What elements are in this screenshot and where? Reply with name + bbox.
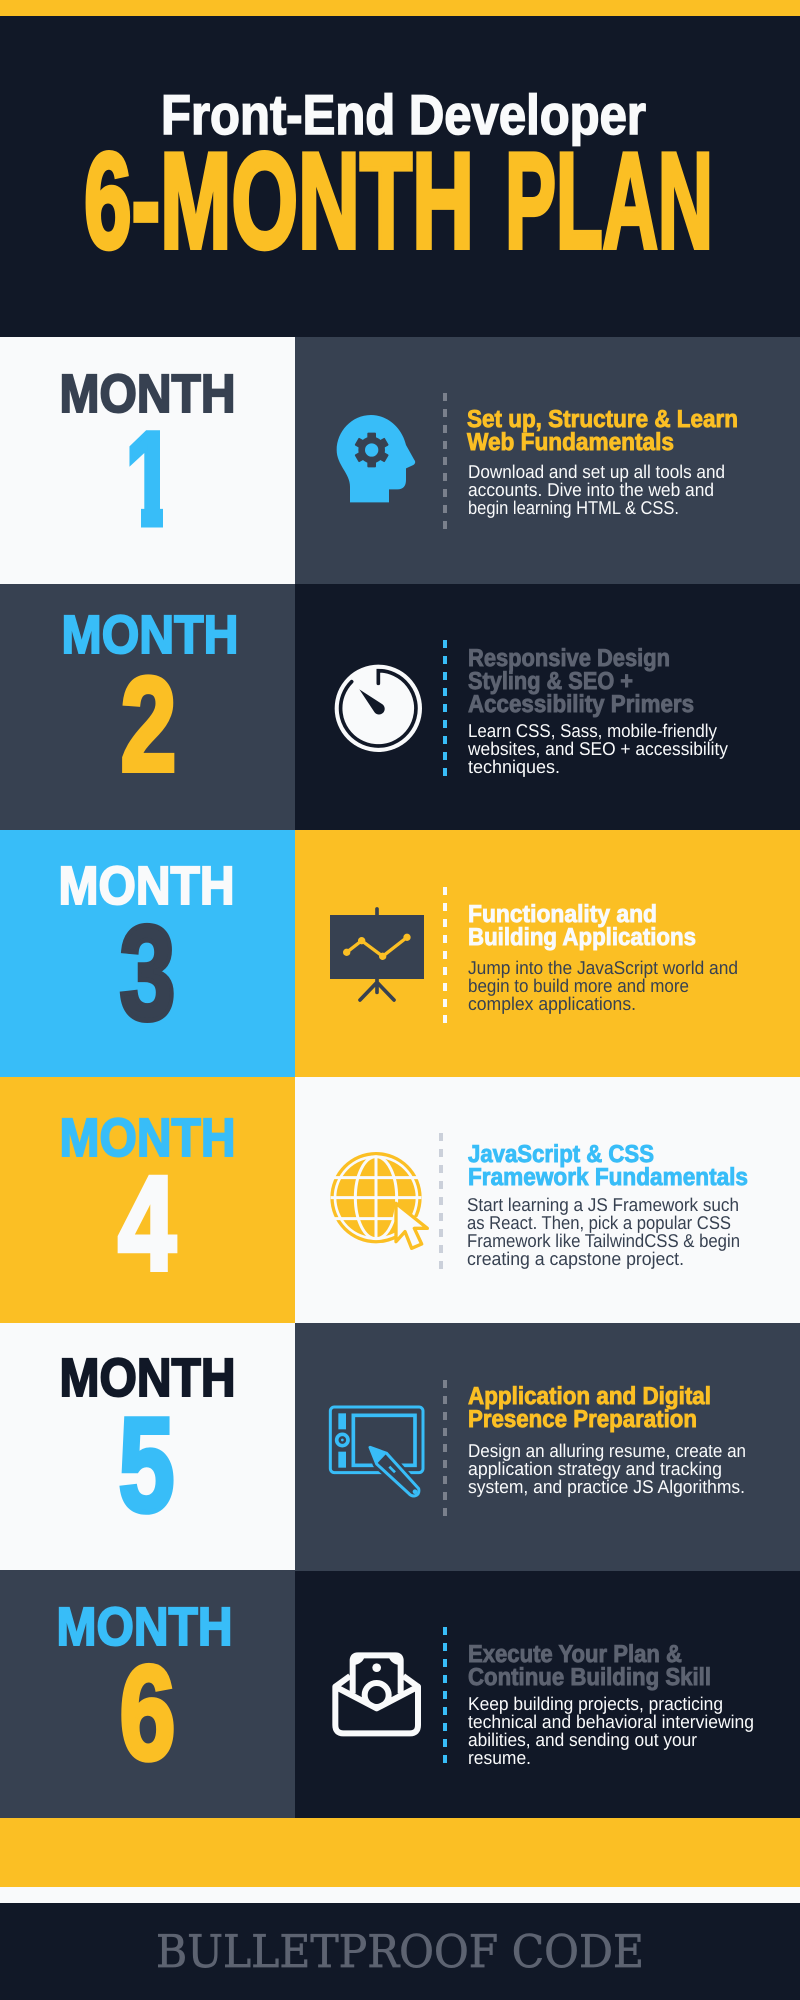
month 1 heading: Set up, Structure & Learn xyxy=(467,406,738,433)
month 2 heading: Styling & SEO + xyxy=(468,668,633,695)
month 2 description: techniques. xyxy=(468,756,560,777)
month 2 description: Learn CSS, Sass, mobile-friendly xyxy=(468,720,718,741)
month 6 heading: Continue Building Skill xyxy=(468,1664,711,1691)
icon: head with gear xyxy=(337,415,415,502)
panel: month 5 xyxy=(0,1323,800,1571)
month 5 description: system, and practice JS Algorithms. xyxy=(468,1476,745,1497)
month 1 content xyxy=(295,337,800,584)
month 6 badge: 6 xyxy=(120,1639,176,1788)
month 6 badge: MONTH xyxy=(56,1597,232,1657)
panel: month 4 xyxy=(0,1077,800,1323)
month 2 description: websites, and SEO + accessibility xyxy=(467,738,729,759)
month 5 description: Design an alluring resume, create an xyxy=(468,1440,746,1461)
month 4 badge: 4 xyxy=(118,1150,176,1298)
month 6 description: abilities, and sending out your xyxy=(468,1729,697,1750)
month 4 description xyxy=(467,1194,740,1269)
footer brand: Bulletproof Code: BULLETPROOF CODE xyxy=(156,1925,644,1978)
month 5 badge: MONTH xyxy=(60,1348,236,1408)
month 2 badge: 2 xyxy=(120,650,176,800)
month 1 badge: 1 xyxy=(125,405,175,554)
month 2 heading: Accessibility Primers xyxy=(468,691,694,718)
month 5 heading xyxy=(468,1383,711,1433)
month 3 description: complex applications. xyxy=(468,993,636,1014)
icon: envelope with cash xyxy=(335,1655,418,1733)
month 3 heading: Functionality and xyxy=(468,901,657,928)
month 4 description: Start learning a JS Framework such xyxy=(467,1194,739,1215)
footer band xyxy=(0,1818,800,2000)
month 4 description: Framework like TailwindCSS & begin xyxy=(467,1230,740,1251)
month 5 badge: 5 xyxy=(118,1391,174,1540)
month 1 description: accounts. Dive into the web and xyxy=(468,479,714,500)
month 6 description xyxy=(468,1693,754,1768)
month 3 badge: 3 xyxy=(120,899,176,1048)
title: 6-MONTH PLAN: 6-MONTH xyxy=(84,124,474,276)
panel: month 6 xyxy=(0,1570,800,1818)
month 2 badge xyxy=(0,584,295,830)
month 3 description xyxy=(468,957,738,1014)
panel: month 2 xyxy=(0,584,800,830)
month 4 description: as React. Then, pick a popular CSS xyxy=(467,1212,731,1233)
icon: globe with cursor xyxy=(330,1152,427,1248)
month 5 description xyxy=(468,1440,746,1497)
month 5 description: application strategy and tracking xyxy=(468,1458,722,1479)
month 1 description xyxy=(468,461,725,518)
month 1 description: begin learning HTML & CSS. xyxy=(468,497,679,518)
month 3 heading xyxy=(468,901,696,951)
month 3 heading: Building Applications xyxy=(468,924,696,951)
month 3 badge xyxy=(0,830,295,1077)
month 6 description: Keep building projects, practicing xyxy=(468,1693,723,1714)
month 2 heading: Responsive Design xyxy=(468,645,670,672)
month 4 heading: JavaScript & CSS xyxy=(468,1141,654,1168)
month 6 heading: Execute Your Plan & xyxy=(468,1641,682,1668)
month 2 description xyxy=(467,720,729,777)
month 3 description: begin to build more and more xyxy=(468,975,689,996)
month 6 description: resume. xyxy=(468,1747,531,1768)
month 4 badge: MONTH xyxy=(60,1108,236,1168)
header panel xyxy=(0,0,800,337)
month 4 description: creating a capstone project. xyxy=(467,1248,684,1269)
icon: drawing tablet with pen xyxy=(330,1407,423,1496)
month 4 content xyxy=(295,1077,800,1323)
title: Front-End Developer: Front-End Developer xyxy=(161,83,646,146)
month 5 heading: Presence Preparation xyxy=(468,1406,697,1433)
month 1 badge: MONTH xyxy=(60,364,236,424)
month 6 heading xyxy=(468,1641,711,1691)
month 3 content xyxy=(295,830,800,1077)
panel: month 1 xyxy=(0,337,800,584)
month 1 badge xyxy=(0,337,295,584)
month 2 content xyxy=(295,584,800,830)
month 3 badge: MONTH xyxy=(58,856,234,916)
month 1 heading: Web Fundamentals xyxy=(467,429,674,456)
month 6 description: technical and behavioral interviewing xyxy=(468,1711,754,1732)
panel: month 3 xyxy=(0,830,800,1077)
icon: presentation board xyxy=(330,909,424,1000)
month 2 heading xyxy=(468,645,694,718)
month 6 badge xyxy=(0,1570,295,1818)
icon: stopwatch xyxy=(335,665,422,752)
month 1 description: Download and set up all tools and xyxy=(468,461,725,482)
month 4 heading: Framework Fundamentals xyxy=(468,1164,748,1191)
month 5 badge xyxy=(0,1323,295,1570)
month 5 content xyxy=(295,1323,800,1571)
month 4 heading xyxy=(468,1141,748,1191)
month 6 content xyxy=(295,1571,800,1818)
month 1 heading xyxy=(467,406,738,456)
month 3 description: Jump into the JavaScript world and xyxy=(468,957,738,978)
month 4 badge xyxy=(0,1077,295,1323)
month 5 heading: Application and Digital xyxy=(468,1383,711,1410)
month 2 badge: MONTH xyxy=(62,605,238,665)
